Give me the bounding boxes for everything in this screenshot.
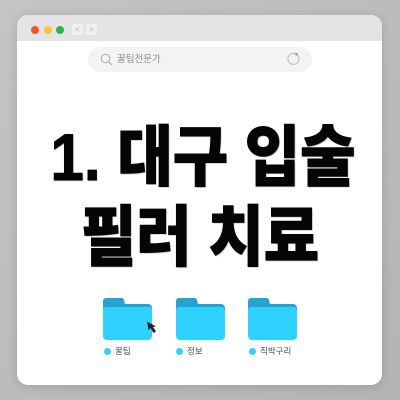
- back button: [72, 24, 83, 35]
- label: 직박구리: [249, 346, 291, 356]
- window button: green: [56, 26, 64, 34]
- title bar: [17, 15, 382, 41]
- label dot: [249, 348, 256, 354]
- window button: red: [31, 26, 39, 34]
- forward button: >: [89, 25, 94, 34]
- label dot: [104, 348, 111, 354]
- label: 꿀팁: [104, 346, 131, 356]
- label dot: [176, 348, 183, 354]
- icon: magnifier: [100, 54, 112, 66]
- search bar: [88, 47, 312, 72]
- back button: <: [75, 25, 80, 34]
- label text: 꿀팁: [115, 346, 131, 356]
- title line 1: 1. 대구 입술: [50, 120, 355, 194]
- window button: yellow: [44, 26, 52, 34]
- forward button: [86, 24, 97, 35]
- icon: reload: [287, 52, 300, 65]
- title line 2: 필러 치료: [81, 200, 319, 274]
- folder: 직박구리: [248, 298, 297, 340]
- folder: 정보: [176, 298, 225, 340]
- search text: 꿀팁전문가: [117, 54, 161, 65]
- label text: 직박구리: [260, 346, 291, 356]
- folder: 꿀팁: [103, 298, 152, 340]
- icon: mouse cursor: [147, 322, 156, 333]
- label: 정보: [176, 346, 203, 356]
- label text: 정보: [187, 346, 203, 356]
- title: [50, 120, 355, 274]
